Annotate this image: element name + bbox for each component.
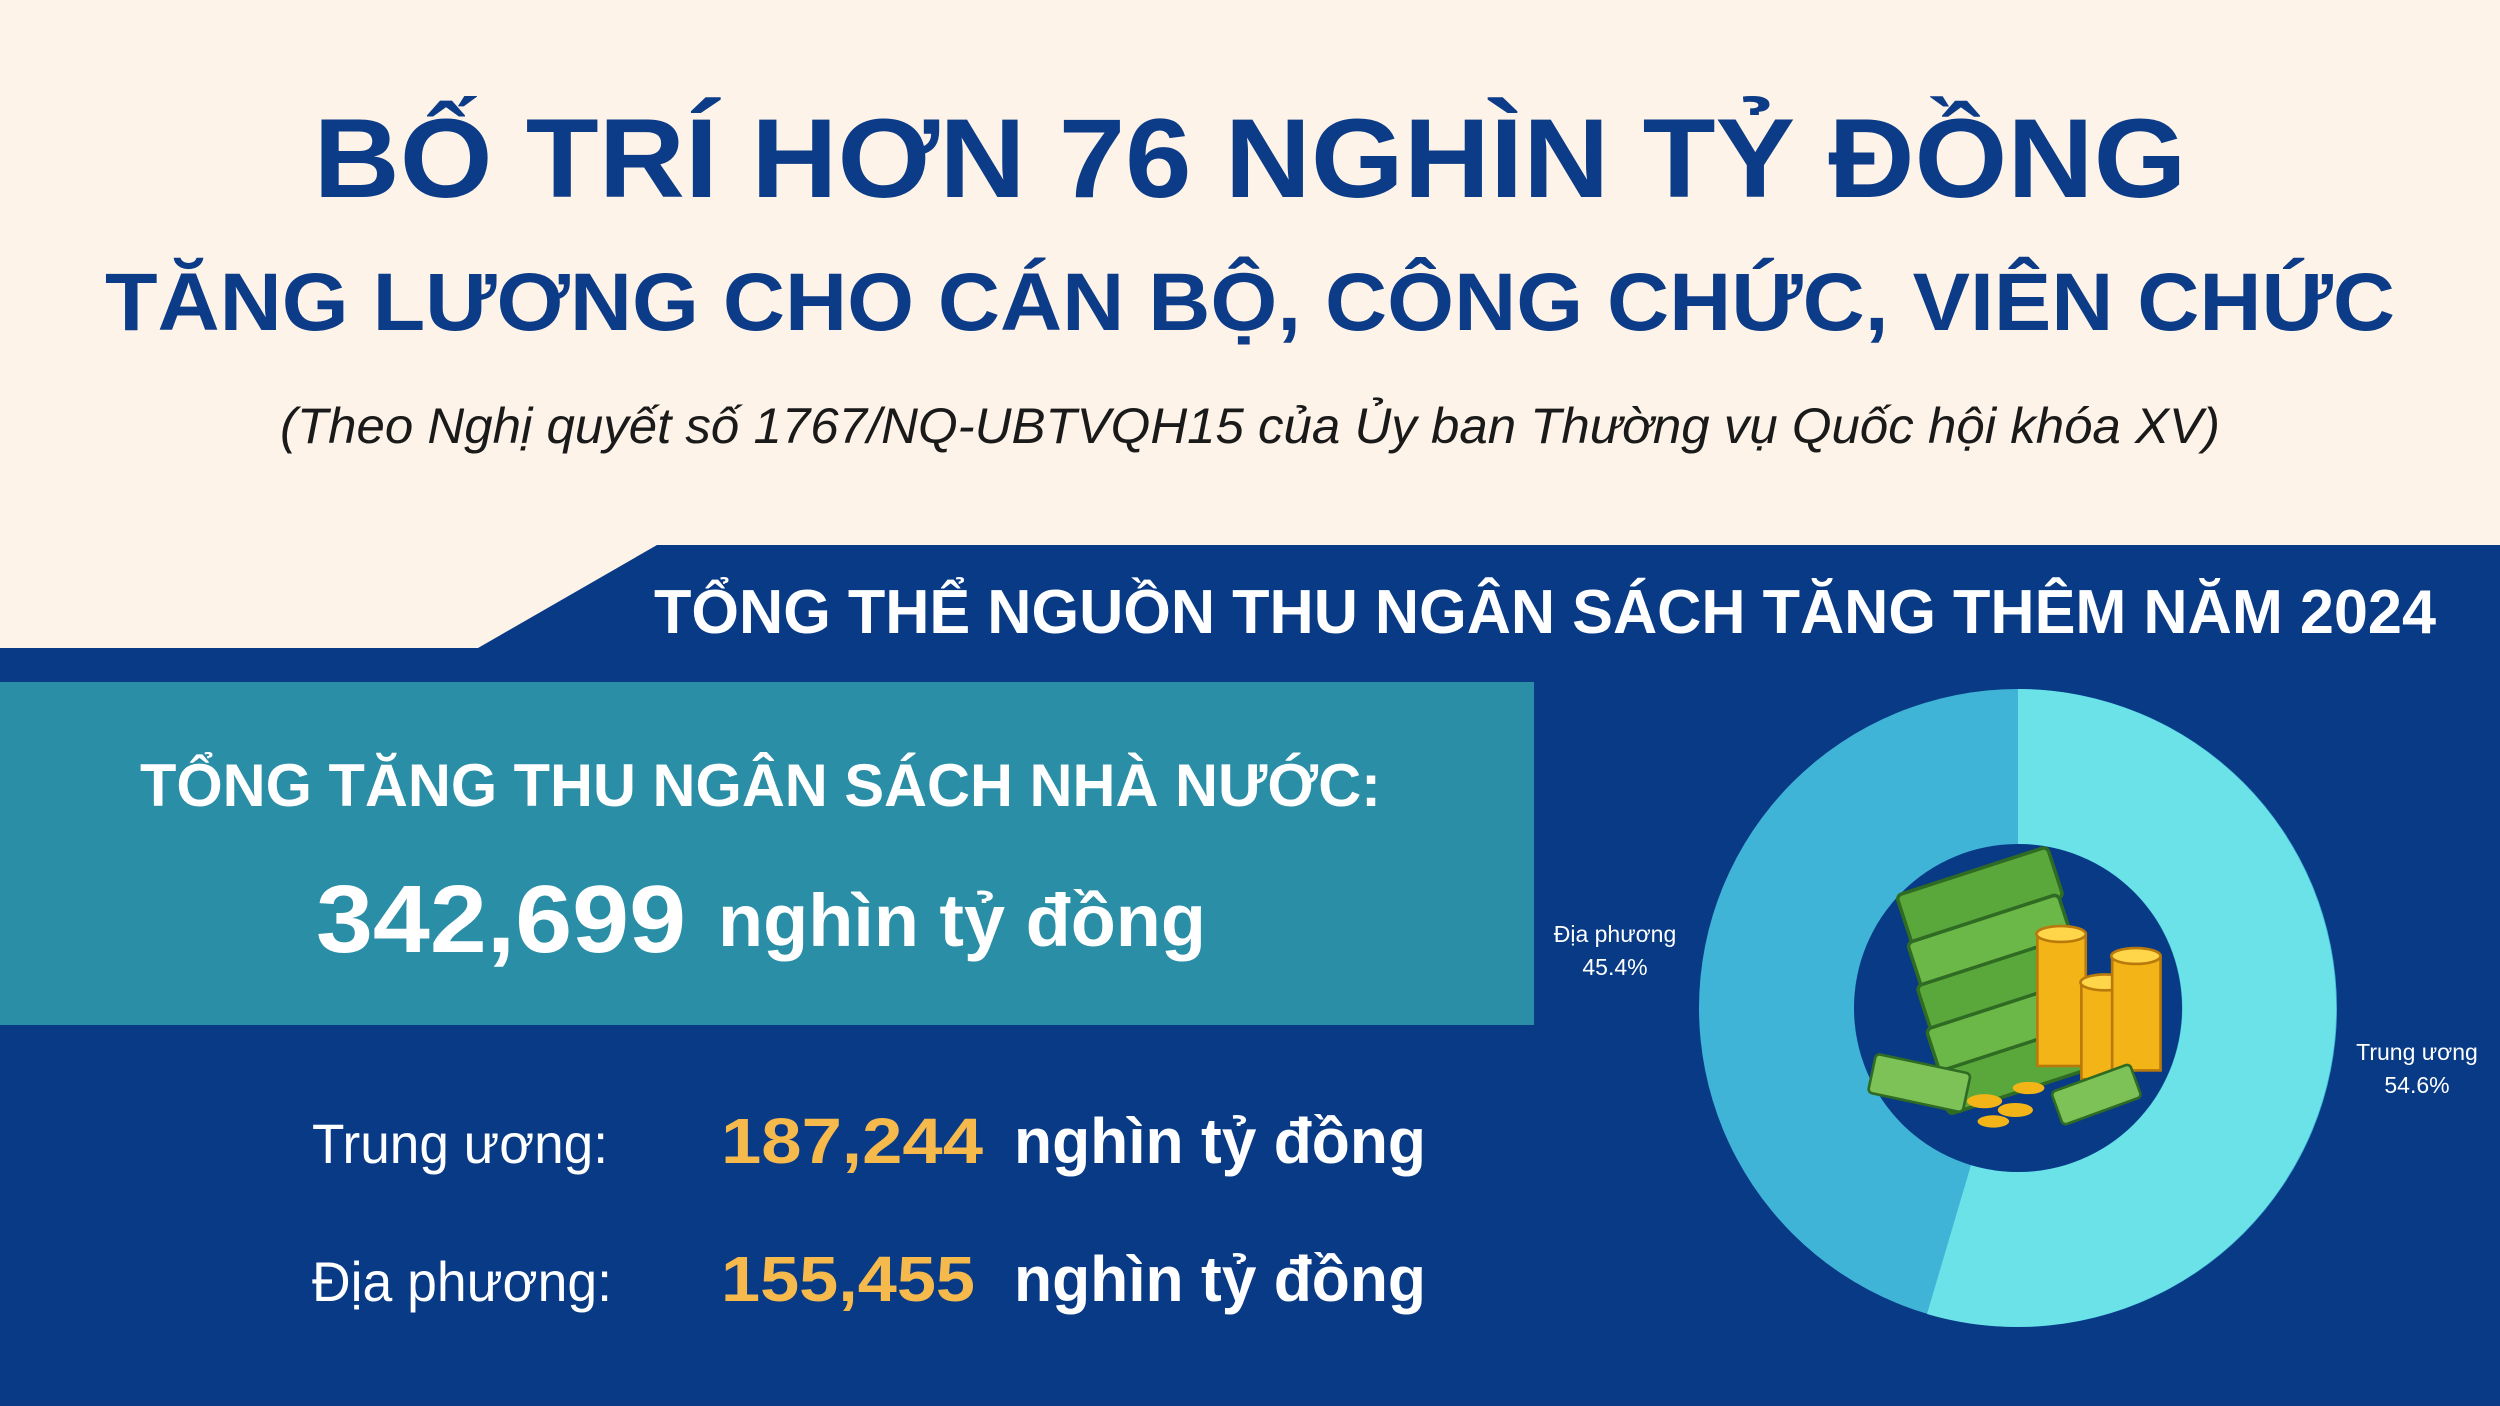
- panel: total box: nghìn tỷ đồng: [718, 879, 1206, 962]
- text block: Dia phuong: nghìn tỷ đồng: [1014, 1243, 1426, 1315]
- title: [105, 96, 2395, 348]
- text block: Trung uong: Trung ương:: [312, 1112, 608, 1175]
- label: Dia phuong: 45.4%: [1582, 954, 1648, 980]
- label: Dia phuong: [1554, 921, 1676, 980]
- title: BỐ TRÍ HƠN 76 NGHÌN TỶ ĐỒNG: [314, 96, 2186, 221]
- text block: Trung uong: 187,244: [721, 1105, 983, 1177]
- text block: Dia phuong: Địa phương:: [312, 1250, 612, 1313]
- donut chart: [1699, 689, 2337, 1327]
- label: Trung uong: [2356, 1039, 2478, 1098]
- icon: money stacks: [1868, 847, 2161, 1128]
- text block: Dia phuong: 155,455: [721, 1243, 975, 1315]
- panel: total box: [0, 682, 1534, 1025]
- text block: Trung uong: [312, 1105, 1426, 1177]
- label: Trung uong: 54.6%: [2384, 1072, 2450, 1098]
- text block: Trung uong: nghìn tỷ đồng: [1014, 1105, 1426, 1177]
- label: Dia phuong: Địa phương: [1554, 921, 1676, 947]
- title: TĂNG LƯƠNG CHO CÁN BỘ, CÔNG CHỨC, VIÊN CHỨC: [105, 256, 2395, 348]
- text block: Dia phuong: [312, 1243, 1426, 1315]
- label: Trung uong: Trung ương: [2356, 1039, 2478, 1065]
- panel: total box: TỔNG TĂNG THU NGÂN SÁCH NHÀ NƯỚC:: [140, 752, 1381, 819]
- panel: dark blue band: [0, 545, 2500, 1406]
- section heading: TỔNG THỂ NGUỒN THU NGÂN SÁCH TĂNG THÊM NĂM 2024: [654, 577, 2437, 647]
- subtitle: (Theo Nghị quyết số 1767/NQ-UBTVQH15 của Ủy ban Thường vụ Quốc hội khóa XV): [280, 397, 2220, 454]
- panel: total box: 342,699: [316, 866, 686, 973]
